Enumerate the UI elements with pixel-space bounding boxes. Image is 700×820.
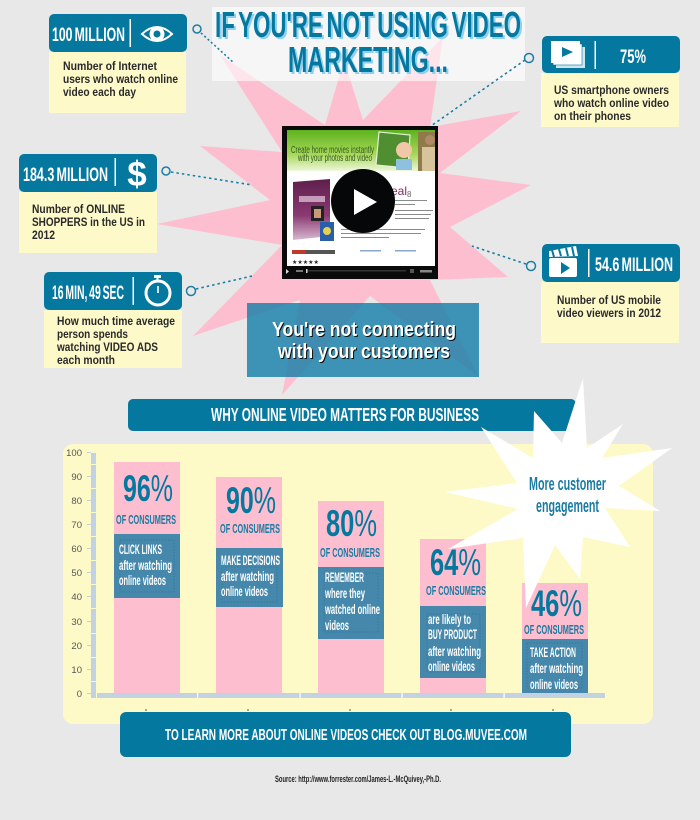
bar: 96% bbox=[114, 462, 180, 693]
callout: not connecting: You're not connecting bbox=[272, 319, 456, 341]
panel: 54.6 million: video viewers in 2012 bbox=[557, 308, 661, 320]
panel: 75% bbox=[541, 36, 680, 127]
panel: 16 min 49 sec: person spends bbox=[57, 329, 128, 341]
panel: 184.3 million: 2012 bbox=[32, 230, 55, 242]
y axis: 90 bbox=[71, 472, 82, 483]
bar: 64%: after watching bbox=[428, 644, 481, 659]
panel: 75%: US smartphone owners bbox=[554, 85, 669, 97]
bar: 80%: REMEMBER bbox=[325, 570, 364, 585]
panel: 16 min 49 sec: How much time average bbox=[57, 316, 175, 328]
icon: dollar: $ bbox=[127, 155, 147, 194]
bar: 80%: 80% bbox=[326, 503, 377, 544]
icon: stopwatch bbox=[146, 275, 170, 305]
callout: more customer engagement starburst: More customer bbox=[529, 474, 606, 494]
panel: 75%: 75% bbox=[620, 47, 646, 68]
panel: 16 min 49 sec: watching VIDEO ADS bbox=[56, 342, 158, 354]
y axis: 100 bbox=[66, 448, 82, 459]
panel: 100 million: users who watch online bbox=[63, 74, 178, 86]
bar: 46%: TAKE ACTION bbox=[530, 645, 576, 660]
panel: 100 million: video each day bbox=[63, 87, 137, 99]
video banner: Create home movies instantly bbox=[291, 145, 374, 156]
bar: 90%: online videos bbox=[221, 584, 268, 599]
bar: 80%: videos bbox=[325, 618, 349, 633]
heading: why online video matters bbox=[128, 399, 576, 431]
bar: 80%: where they bbox=[324, 586, 365, 601]
bar: 96%: after watching bbox=[119, 558, 172, 573]
product copy: 8 bbox=[407, 190, 412, 199]
bar: 64%: are likely to bbox=[428, 612, 471, 627]
panel: 184.3 million: Number of ONLINE bbox=[32, 204, 125, 216]
bar: 96%: 96% bbox=[123, 468, 173, 509]
icon: video stack bbox=[551, 41, 585, 68]
callout: more customer engagement starburst bbox=[445, 378, 672, 608]
product copy: ★★★★★ bbox=[292, 259, 319, 266]
y axis: 40 bbox=[71, 592, 82, 603]
title text: IF YOU'RE NOT USING VIDEO bbox=[215, 4, 521, 45]
y axis: 20 bbox=[71, 641, 82, 652]
y axis bbox=[66, 448, 96, 700]
video banner bbox=[287, 130, 435, 171]
bar: 90%: 90% bbox=[226, 480, 276, 521]
bar: 90%: after watching bbox=[221, 569, 274, 584]
panel: 16 min 49 sec: each month bbox=[57, 355, 115, 367]
callout: not connecting bbox=[247, 303, 479, 377]
icon: clapperboard bbox=[549, 246, 578, 277]
y axis: 30 bbox=[71, 617, 82, 628]
callout: more customer engagement starburst: engagement bbox=[536, 496, 599, 516]
panel: 16 min 49 sec bbox=[44, 272, 182, 368]
connector: 54.6 million bbox=[472, 246, 536, 270]
bar: 64%: BUY PRODUCT bbox=[428, 627, 477, 642]
title text bbox=[215, 4, 521, 80]
bar: 46% bbox=[522, 583, 588, 693]
bar: 64%: OF CONSUMERS bbox=[426, 583, 486, 598]
bar chart bbox=[66, 448, 605, 710]
bar: 64% bbox=[420, 539, 486, 693]
bar: 90%: MAKE DECISIONS bbox=[221, 553, 280, 568]
panel: 54.6 million: Number of US mobile bbox=[557, 295, 661, 307]
callout: not connecting: with your customers bbox=[277, 341, 450, 363]
connector: 184.3 million bbox=[162, 167, 252, 185]
connector: 16 min bbox=[186, 276, 252, 296]
icon: play button bbox=[331, 169, 395, 233]
bar: 90% bbox=[216, 477, 283, 693]
panel: 184.3 million bbox=[19, 154, 157, 253]
icon: eye bbox=[142, 26, 172, 42]
panel: 54.6 million bbox=[541, 244, 680, 343]
bar: 80%: OF CONSUMERS bbox=[320, 545, 380, 560]
panel: 100 million: Number of Internet bbox=[63, 61, 157, 73]
bar: 96%: CLICK LINKS bbox=[119, 542, 162, 557]
panel: 184.3 million: SHOPPERS in the US in bbox=[32, 217, 145, 229]
panel: 100 million bbox=[49, 14, 187, 113]
bar: 96%: online videos bbox=[119, 573, 166, 588]
panel: chart background bbox=[63, 444, 653, 724]
bar: 90%: OF CONSUMERS bbox=[220, 521, 280, 536]
pink starburst background bbox=[157, 37, 531, 395]
y axis: 0 bbox=[77, 689, 82, 700]
y axis: 50 bbox=[71, 568, 82, 579]
panel: 184.3 million: 184.3 MILLION bbox=[23, 165, 108, 186]
source: Source: http://www.forrester.com/James-L.-McQuivey,-Ph.D. bbox=[275, 774, 441, 784]
banner: learn more bbox=[120, 712, 571, 757]
player controls bbox=[286, 269, 432, 274]
bar: 46%: 46% bbox=[531, 583, 582, 624]
video player bbox=[282, 126, 438, 279]
bar: 64%: 64% bbox=[430, 542, 481, 583]
title text: MARKETING... bbox=[288, 39, 448, 80]
product copy bbox=[292, 184, 433, 266]
connector: 100 million bbox=[193, 25, 234, 63]
y axis: 80 bbox=[71, 496, 82, 507]
product copy: eal bbox=[391, 184, 407, 198]
bar: 64%: online videos bbox=[428, 659, 475, 674]
panel: 100 million: 100 MILLION bbox=[52, 25, 125, 46]
x axis bbox=[97, 693, 605, 710]
title bbox=[212, 4, 525, 81]
panel: 16 min 49 sec: 16 MIN, 49 SEC bbox=[52, 283, 124, 304]
bar: 46%: OF CONSUMERS bbox=[524, 622, 584, 637]
y axis: 70 bbox=[71, 520, 82, 531]
bar: 46%: after watching bbox=[530, 661, 583, 676]
panel: 75%: on their phones bbox=[554, 111, 631, 123]
bar: 46%: online videos bbox=[530, 677, 578, 692]
y axis: 60 bbox=[71, 544, 82, 555]
bar: 80% bbox=[318, 501, 384, 693]
panel: 75%: who watch online video bbox=[553, 98, 669, 110]
bar: 96%: OF CONSUMERS bbox=[116, 512, 176, 527]
connector: 75% bbox=[431, 54, 534, 126]
bar: 80%: watched online bbox=[324, 602, 380, 617]
heading: why online video matters: WHY ONLINE VIDEO MATTERS FOR BUSINESS bbox=[211, 405, 479, 425]
product box bbox=[293, 179, 334, 241]
video banner: with your photos and video bbox=[297, 153, 372, 164]
y axis: 10 bbox=[71, 665, 82, 676]
title backdrop bbox=[212, 7, 525, 81]
